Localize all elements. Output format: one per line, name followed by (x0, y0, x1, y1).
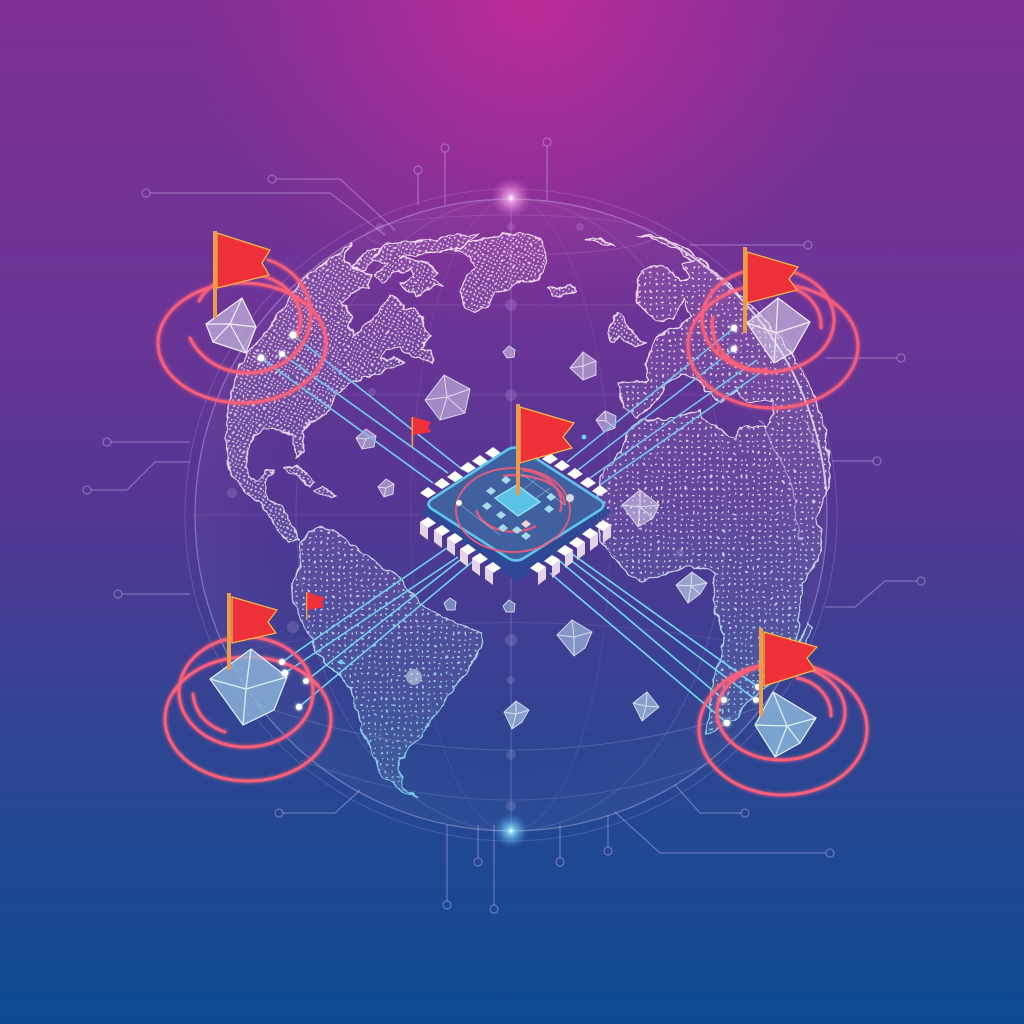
polyhedron (557, 620, 592, 656)
endpoint dots (258, 325, 761, 726)
pins back (420, 447, 608, 498)
land dots (226, 232, 828, 791)
polyhedron (622, 490, 659, 527)
pins front (420, 517, 611, 585)
globe wireframe (185, 189, 837, 841)
polyhedron (596, 411, 616, 432)
dotted blob (406, 669, 422, 685)
connection lines: top left (261, 335, 463, 483)
flag: top left (213, 231, 270, 318)
polyhedron: bottom left (210, 649, 287, 725)
polyhedron: bottom right (755, 692, 816, 757)
polyhedron (356, 429, 376, 449)
polyhedron: top left (206, 298, 256, 353)
polyhedron (504, 701, 529, 729)
polyhedron (633, 692, 659, 721)
connection lines: bottom right (550, 549, 758, 723)
cyan dots on lines (338, 434, 722, 712)
polyhedron (378, 479, 394, 497)
flag: top right (743, 247, 798, 333)
ring group: bottom right (699, 663, 867, 795)
coastlines (227, 233, 830, 796)
chip circuit rings (456, 468, 570, 552)
continents (dotted world map) (224, 232, 832, 798)
flag: small upper (412, 417, 431, 447)
chip (420, 447, 612, 585)
ring group: bottom left (165, 637, 331, 781)
polyhedron (425, 375, 470, 420)
small polyhedra scattered (356, 346, 707, 729)
chip shadow (420, 450, 612, 582)
flag: center (516, 404, 574, 495)
flag: bottom right (759, 628, 817, 716)
polyhedron: top right (747, 298, 810, 363)
polyhedron (570, 352, 596, 380)
connection lines: bottom left (282, 548, 472, 707)
chip traces (462, 474, 565, 535)
ring group: top right (688, 268, 858, 408)
flag: small lower (306, 592, 325, 620)
chip body (428, 448, 604, 560)
polar glow: top (491, 178, 531, 218)
flag: bottom left (227, 593, 277, 670)
polyhedron (503, 346, 515, 358)
connection lines: top right (567, 328, 760, 485)
ring group: top left (158, 260, 326, 403)
circuit traces around globe (83, 138, 925, 913)
chip small squares (456, 476, 574, 540)
polyhedron (444, 598, 456, 610)
polyhedron (503, 600, 515, 612)
polar glow: bottom (494, 814, 528, 848)
polyhedron (676, 572, 707, 603)
chip core (495, 485, 540, 516)
